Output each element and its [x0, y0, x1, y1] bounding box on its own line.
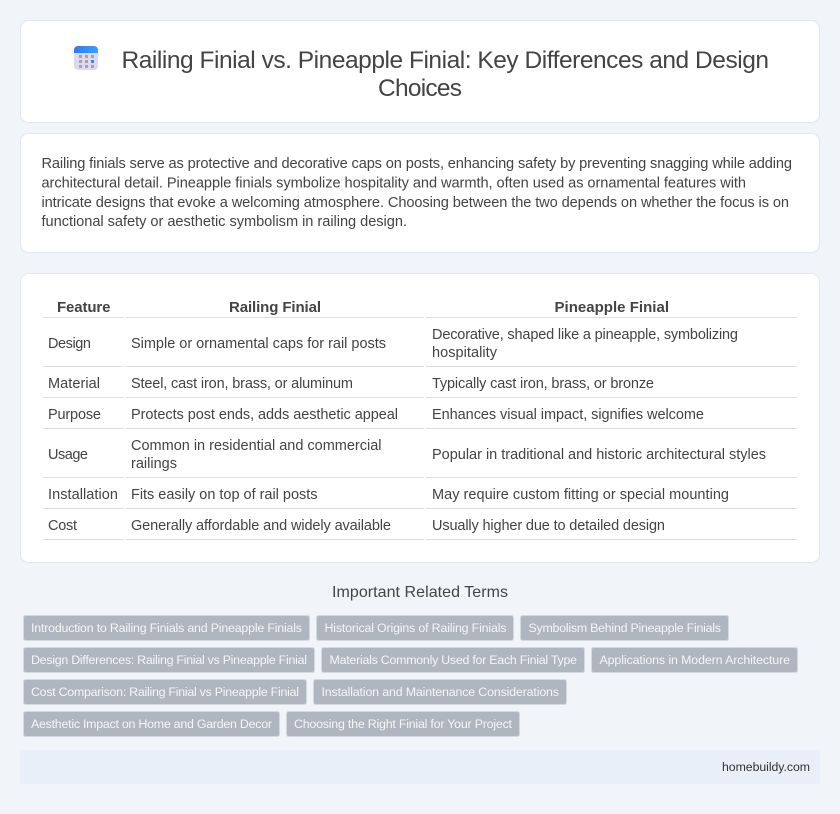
related term tags: Introduction to Railing Finials and Pineapple Finials — [31, 621, 302, 635]
table row: design: Simple or ornamental caps for rail posts — [131, 336, 386, 352]
table row: material: Material — [48, 376, 100, 392]
table row: usage: railings — [131, 456, 177, 472]
table row: cost — [48, 518, 665, 534]
text block: introduction paragraph: Railing finials serve as protective and decorative caps on posts, enhancing safety by preventing snagging while adding — [42, 156, 792, 172]
table header row — [57, 299, 669, 316]
related term tags: Applications in Modern Architecture — [600, 653, 790, 667]
related term tags: Choosing the Right Finial for Your Project — [294, 717, 513, 731]
title: Choices — [378, 75, 462, 102]
text block: introduction paragraph: architectural detail. Pineapple finials symbolize hospitality and warmth, often used as ornamental features with — [42, 176, 746, 192]
text block: introduction paragraph: intricate designs that evoke a welcoming atmosphere. Choosing between the two depends on whether the focus is on — [42, 195, 789, 211]
table row: design: hospitality — [432, 345, 498, 361]
table row: usage — [48, 438, 766, 472]
table row: design — [48, 327, 738, 361]
table row: material: Steel, cast iron, brass, or aluminum — [131, 376, 353, 392]
table row: material: Typically cast iron, brass, or bronze — [432, 376, 654, 392]
panel: title card — [20, 20, 820, 122]
table row: installation: Fits easily on top of rail posts — [131, 487, 318, 503]
table row: design: Decorative, shaped like a pineapple, symbolizing — [432, 327, 738, 343]
table row: installation: May require custom fitting or special mounting — [432, 487, 729, 503]
table row: purpose: Protects post ends, adds aesthetic appeal — [131, 407, 398, 423]
table row: usage: Common in residential and commercial — [131, 438, 382, 454]
table row: material — [48, 376, 654, 392]
table header row: Feature — [57, 299, 110, 316]
related term tags: Cost Comparison: Railing Finial vs Pineapple Finial — [31, 685, 299, 699]
table header row: Pineapple Finial — [554, 299, 669, 316]
table row: cost: Usually higher due to detailed design — [432, 518, 665, 534]
text block: introduction paragraph: functional safety or aesthetic symbolism in railing design. — [42, 214, 407, 230]
related term tags: Installation and Maintenance Considerations — [322, 685, 559, 699]
table row: usage: Usage — [48, 447, 88, 463]
text block: introduction paragraph — [42, 156, 792, 230]
related term tags: Design Differences: Railing Finial vs Pineapple Finial — [31, 653, 307, 667]
table row: purpose: Enhances visual impact, signifies welcome — [432, 407, 704, 423]
related term tags: Aesthetic Impact on Home and Garden Decor — [31, 717, 272, 731]
table row: cost: Generally affordable and widely available — [131, 518, 391, 534]
panel: introduction — [20, 134, 820, 252]
table row: cost: Cost — [48, 518, 77, 534]
table row: purpose — [48, 407, 704, 423]
title: Railing Finial vs. Pineapple Finial: Key Differences and Design — [122, 47, 769, 74]
related term tags: Materials Commonly Used for Each Finial Type — [330, 653, 577, 667]
title — [122, 47, 769, 102]
related term tags: Historical Origins of Railing Finials — [324, 621, 506, 635]
related term tags — [24, 616, 798, 736]
footer — [20, 750, 820, 784]
icon: calendar — [74, 46, 98, 70]
panel: comparison table — [20, 274, 820, 562]
table header row: Railing Finial — [229, 299, 321, 316]
footer: homebuildy.com — [722, 760, 810, 774]
table row: installation: Installation — [48, 487, 118, 503]
table row: usage: Popular in traditional and historic architectural styles — [432, 447, 766, 463]
related term tags: Symbolism Behind Pineapple Finials — [528, 621, 721, 635]
table row: purpose: Purpose — [48, 407, 101, 423]
table row: installation — [48, 487, 729, 503]
table row: design: Design — [48, 336, 91, 352]
heading: important related terms: Important Related Terms — [332, 584, 508, 601]
